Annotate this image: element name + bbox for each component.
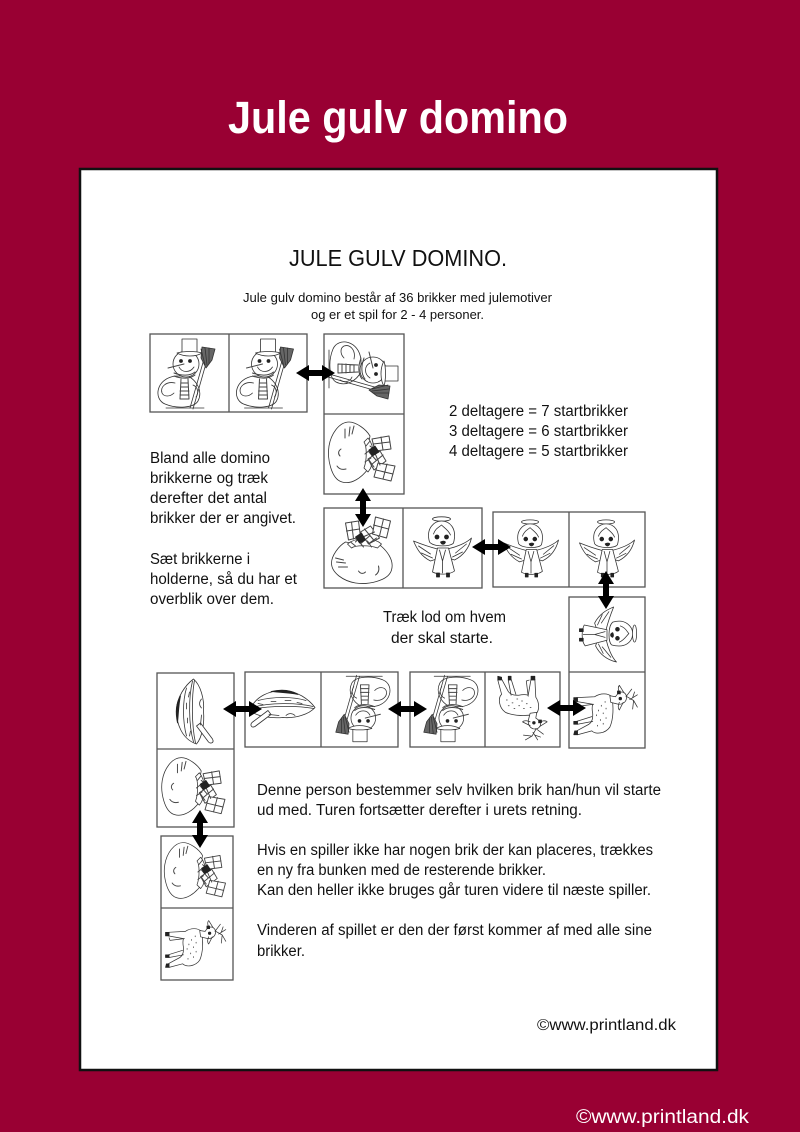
arrow: seventh to eighth tile (223, 701, 262, 717)
domino tile: angel and deer, vertical (569, 597, 645, 748)
arrow: fourth to fifth tile (598, 571, 614, 609)
domino tile: bowl and snowman (245, 672, 398, 747)
text block: rules: Vinderen af spillet er den der først kommer af med alle sine (257, 922, 652, 939)
domino tile: snowman and deer (410, 672, 560, 747)
text block: draw lots (383, 609, 506, 647)
text block: rules (257, 782, 661, 960)
domino tile: sack and deer, vertical (161, 836, 233, 980)
arrow: fifth to sixth tile (547, 700, 586, 716)
panel credit: ©www.printland.dk (537, 1017, 676, 1034)
text block: start tiles per player count: 2 deltagere = 7 startbrikker (449, 403, 628, 420)
arrow: third to fourth tile (472, 539, 511, 555)
text block: shuffle and draw (150, 450, 298, 608)
domino tile: sack and angel (324, 508, 482, 588)
arrow: first to second tile (296, 365, 335, 381)
footer credit: ©www.printland.dk (576, 1106, 749, 1128)
text block: draw lots: Træk lod om hvem (383, 609, 506, 626)
arrow: eighth to ninth tile (192, 810, 208, 848)
text block: shuffle and draw: brikkerne og træk (150, 470, 268, 487)
text block: shuffle and draw: brikker der er angivet. (150, 510, 296, 527)
text block: shuffle and draw: derefter det antal (150, 490, 267, 507)
heading: JULE GULV DOMINO. (289, 245, 507, 271)
text block: introduction: og er et spil for 2 - 4 personer. (311, 307, 484, 322)
panel: game sheet (80, 169, 717, 1070)
domino tile: snowman and snowman (150, 334, 307, 412)
text block: introduction (243, 290, 553, 322)
text block: start tiles per player count (449, 403, 628, 460)
text block: rules: en ny fra bunken med de resterende brikker. (257, 862, 546, 879)
text block: shuffle and draw: overblik over dem. (150, 591, 274, 608)
arrow: sixth to seventh tile (388, 701, 427, 717)
arrow: second to third tile (355, 488, 371, 527)
domino tile: snowman and sack, vertical (324, 334, 404, 494)
text block: introduction: Jule gulv domino består af 36 brikker med julemotiver (243, 290, 553, 305)
domino tile: angel and angel (493, 512, 645, 587)
text block: rules: Hvis en spiller ikke har nogen brik der kan placeres, trækkes (257, 842, 653, 859)
text block: shuffle and draw: holderne, så du har et (150, 571, 298, 588)
text block: rules: Kan den heller ikke bruges går turen videre til næste spiller. (257, 882, 651, 899)
title: Jule gulv domino (228, 92, 568, 143)
text block: start tiles per player count: 4 deltagere = 5 startbrikker (449, 443, 628, 460)
text block: start tiles per player count: 3 deltagere = 6 startbrikker (449, 423, 628, 440)
domino tile: bowl and sack, vertical (157, 673, 234, 827)
text block: shuffle and draw: Sæt brikkerne i (150, 551, 250, 568)
text block: rules: brikker. (257, 943, 305, 960)
text block: rules: ud med. Turen fortsætter derefter i urets retning. (257, 802, 582, 819)
text block: rules: Denne person bestemmer selv hvilken brik han/hun vil starte (257, 782, 661, 799)
text block: draw lots: der skal starte. (391, 630, 493, 647)
text block: shuffle and draw: Bland alle domino (150, 450, 270, 467)
